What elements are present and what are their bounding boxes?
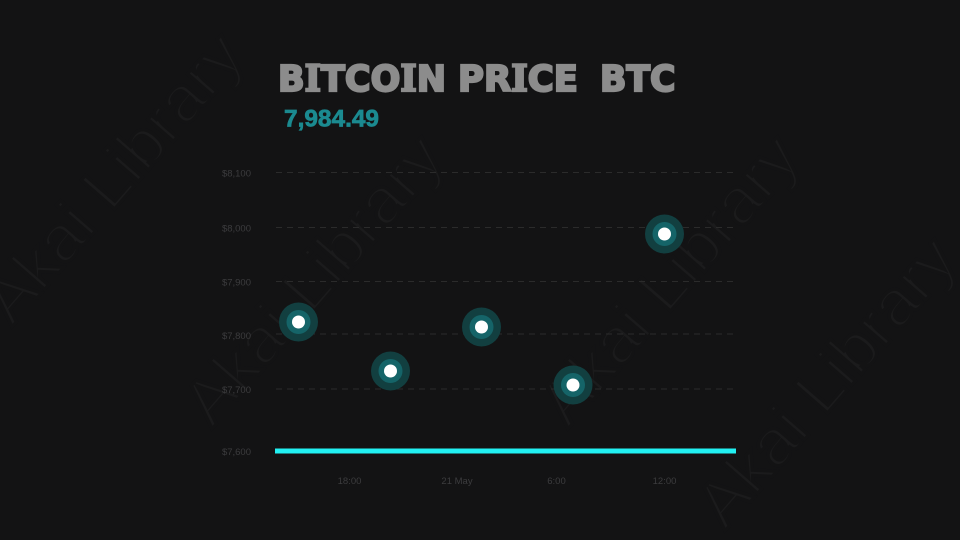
data point 2 [371, 352, 410, 390]
x axis labels: 6:00 [547, 476, 566, 487]
y axis labels: $7,600 [222, 447, 251, 458]
watermarks: Akai Library [681, 223, 960, 540]
title: PRICE [458, 58, 578, 100]
title [278, 58, 676, 100]
x axis labels [338, 476, 676, 487]
data point 5 [645, 214, 684, 254]
chart: price scatter [222, 168, 736, 487]
x axis labels: 18:00 [338, 476, 361, 487]
watermarks: Akai Library [168, 121, 457, 438]
current price: 7,984.49 [284, 106, 379, 132]
y axis labels: $7,800 [222, 331, 251, 342]
y axis labels: $8,000 [222, 224, 251, 234]
y axis labels: $7,700 [222, 385, 251, 396]
data point 4 [554, 366, 592, 404]
y axis labels: $8,100 [222, 168, 251, 180]
data point 3 [462, 308, 501, 346]
title: BITCOIN [278, 58, 446, 100]
x axis labels: 12:00 [653, 476, 676, 487]
baseline [275, 448, 736, 454]
grid lines [276, 172, 736, 389]
title: BTC [600, 59, 676, 100]
y axis labels: $7,900 [222, 278, 251, 288]
x axis labels: 21 May [441, 476, 473, 487]
watermarks: Akai Library [524, 121, 813, 438]
data point 1 [279, 302, 318, 342]
y axis labels [222, 168, 251, 458]
